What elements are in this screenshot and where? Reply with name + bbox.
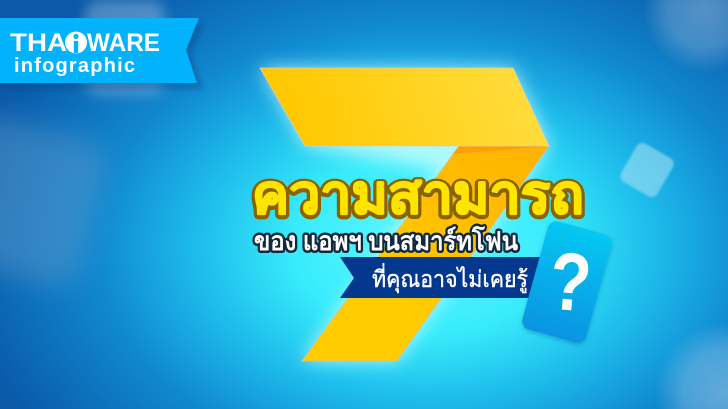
logo ribbon: [0, 18, 205, 90]
ribbon: [0, 18, 199, 83]
phone shadow: [520, 221, 614, 347]
blurred square: left: [0, 110, 111, 291]
title outline: ความสามารถ: [252, 166, 584, 226]
7 glow: [260, 68, 549, 361]
blurred square: top: [85, 0, 165, 95]
question mark: ?: [546, 234, 595, 329]
ribbon shadow: [0, 24, 205, 90]
logo wordmark right: WARE: [87, 29, 160, 57]
7 stem: [302, 146, 549, 361]
infographic label: infographic: [14, 55, 135, 77]
title fill: ความสามารถ: [252, 165, 584, 225]
logo wordmark left: THA: [10, 29, 67, 57]
7 fold shadow: [453, 146, 549, 154]
subtitle: ของ แอพฯ บนสมาร์ทโฟน: [254, 225, 518, 256]
phone body: [520, 219, 614, 345]
title: [252, 165, 584, 226]
logo i icon: [65, 32, 87, 54]
ribbon shape: [340, 257, 545, 298]
blurred square: centre right: [618, 140, 676, 200]
blurred square: top right: [640, 0, 728, 72]
7 top bar: [260, 68, 549, 146]
number 7: [260, 68, 549, 361]
ribbon text: ที่คุณอาจไม่เคยรู้: [372, 263, 528, 293]
icon: phone with question mark: [520, 219, 614, 347]
blue ribbon: [340, 257, 545, 298]
blurred square: bottom right: [650, 320, 728, 409]
